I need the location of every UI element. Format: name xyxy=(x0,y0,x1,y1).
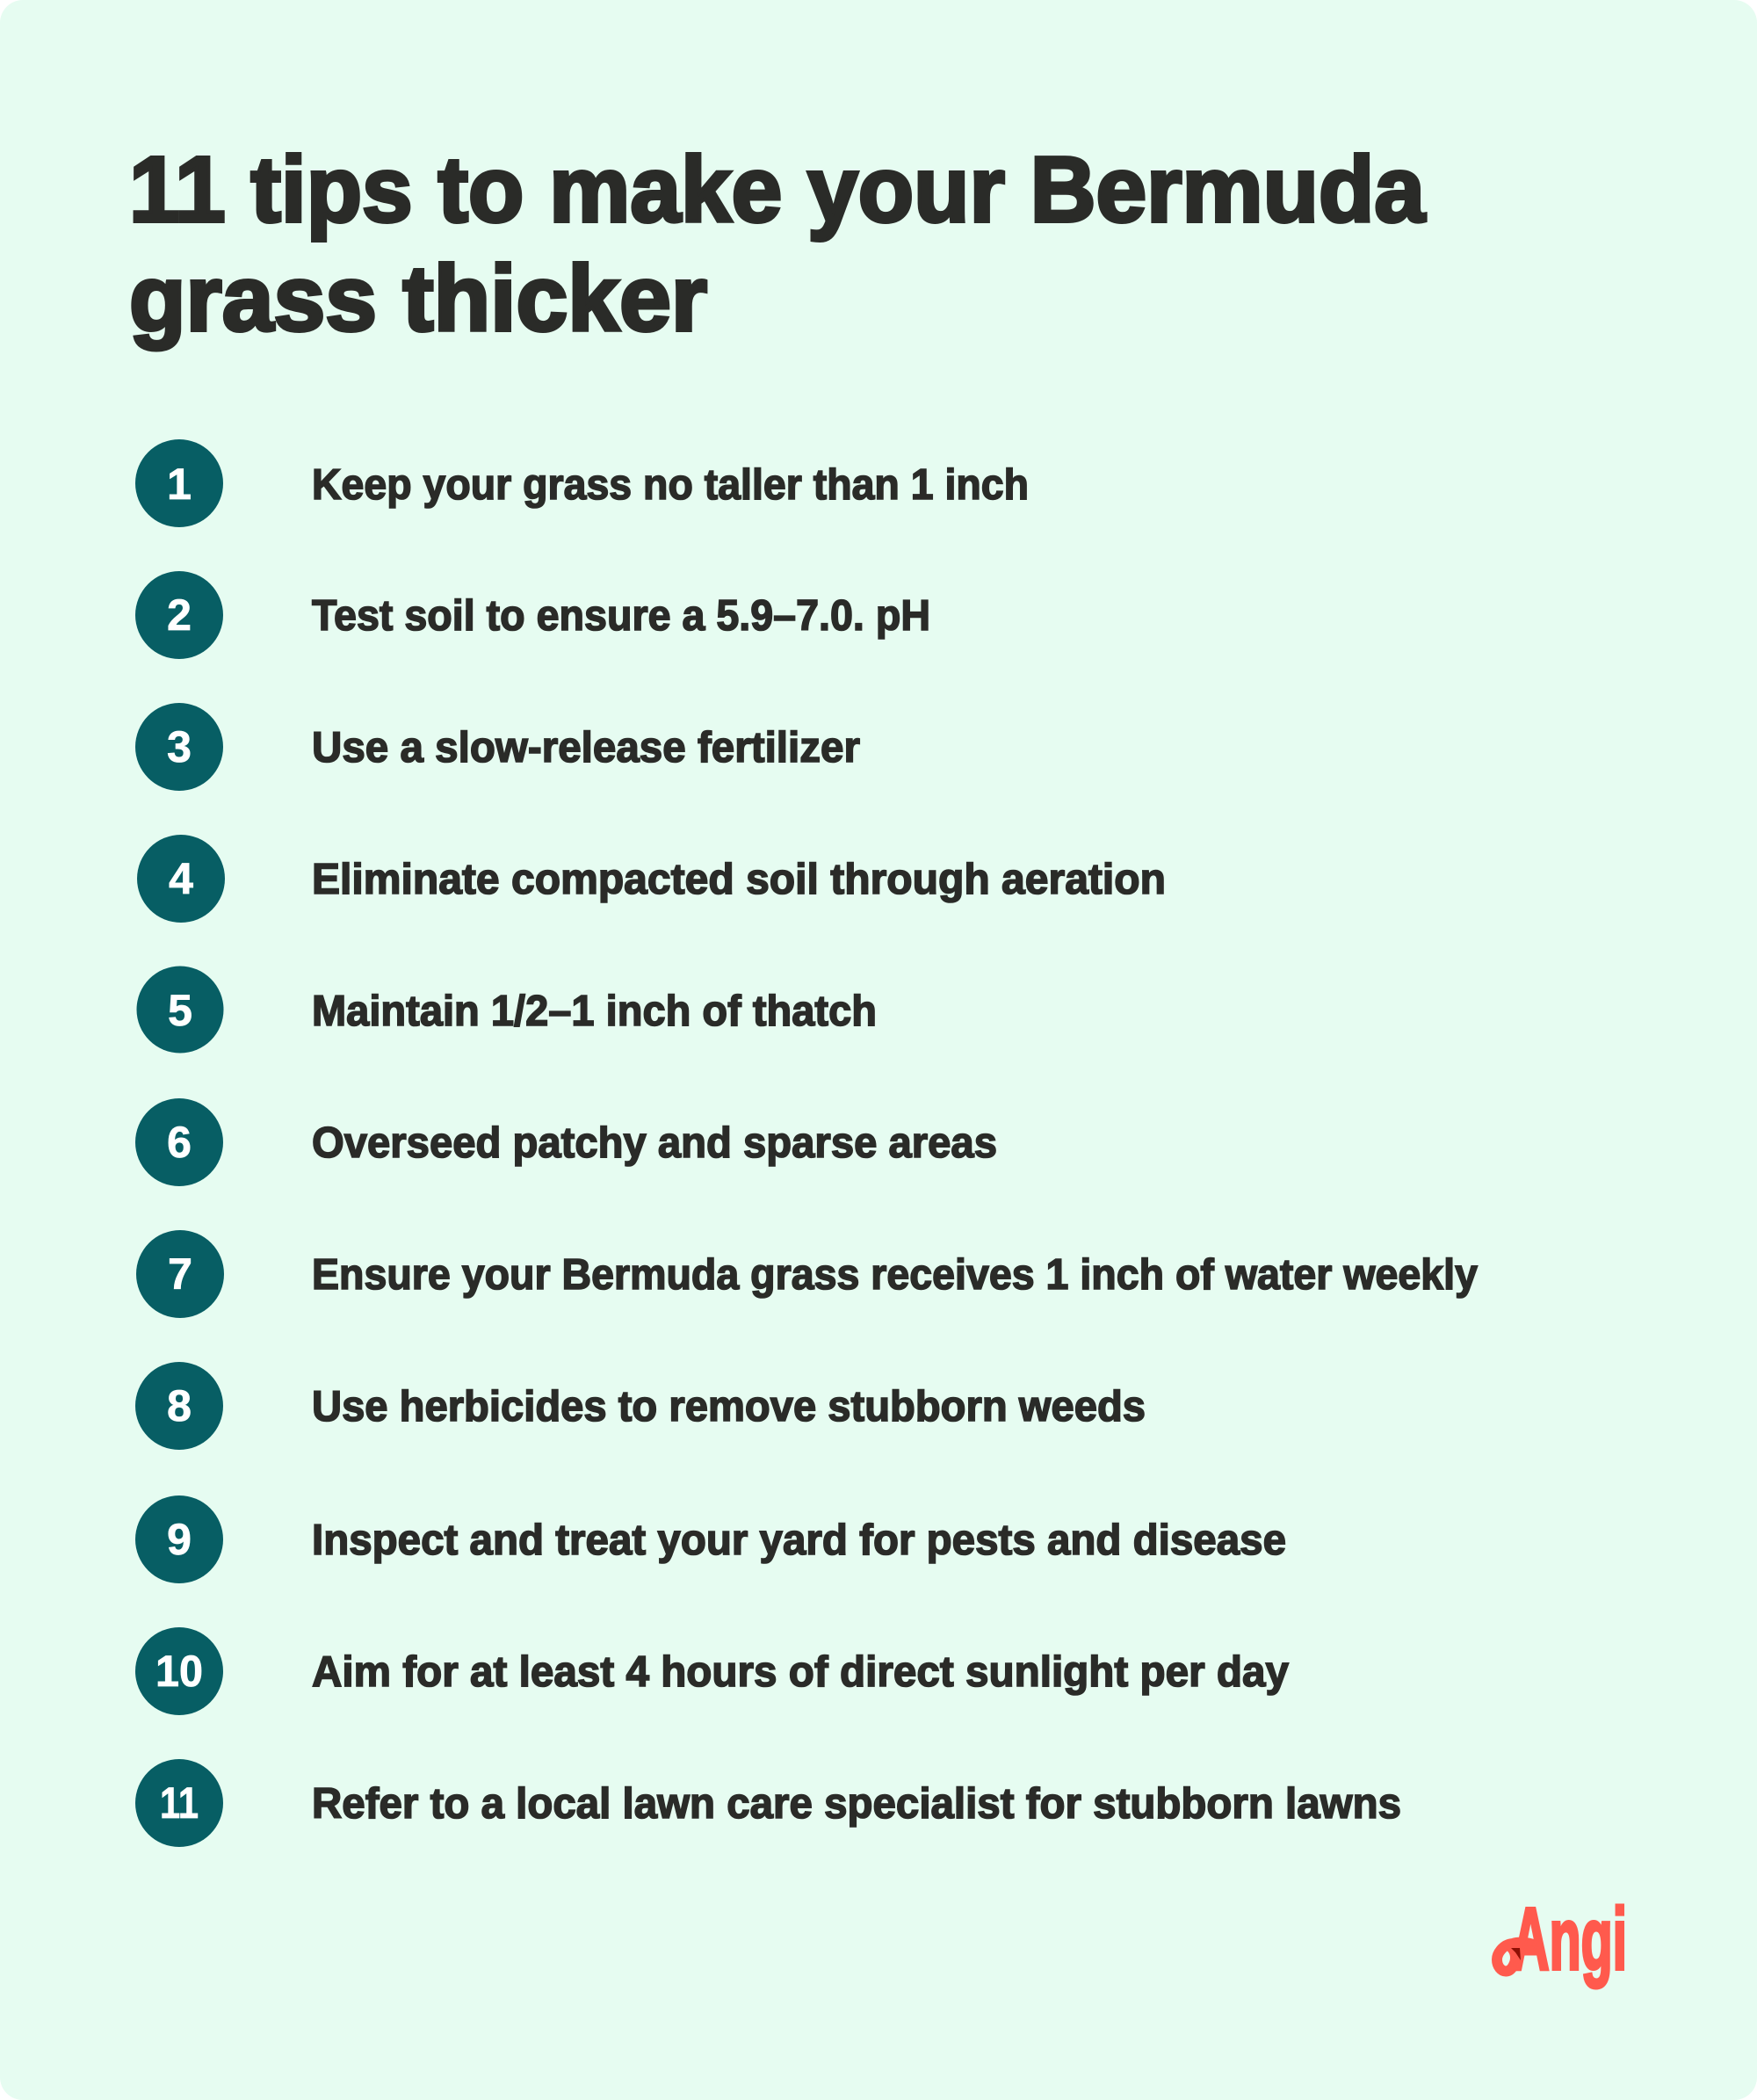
tip 8: 8 xyxy=(167,1381,192,1430)
tip 6: 6 xyxy=(167,1118,192,1167)
tip 8: Use herbicides to remove stubborn weeds xyxy=(312,1383,1146,1430)
tip 2: 2 xyxy=(167,590,192,640)
tip 11 xyxy=(135,1759,1401,1847)
tip 9: 9 xyxy=(167,1515,192,1564)
tip 4: Eliminate compacted soil through aeration xyxy=(312,856,1166,903)
title: grass thicker xyxy=(129,247,707,351)
logo: Angi: Angi xyxy=(1512,1890,1627,1988)
title xyxy=(129,138,1426,351)
tip 8 xyxy=(135,1362,1146,1450)
tip 7: Ensure your Bermuda grass receives 1 inch of water weekly xyxy=(312,1251,1478,1299)
tip 9 xyxy=(135,1495,1286,1583)
tip 10 xyxy=(135,1627,1289,1715)
tip 5 xyxy=(137,967,877,1053)
tip 4: 4 xyxy=(169,854,193,903)
tip 2 xyxy=(135,571,930,659)
tip 6: Overseed patchy and sparse areas xyxy=(312,1119,997,1167)
tip 7 xyxy=(136,1230,1478,1318)
tip 2: Test soil to ensure a 5.9–7.0. pH xyxy=(312,592,930,640)
logo: Angi xyxy=(1497,1890,1627,1988)
tip 10: Aim for at least 4 hours of direct sunlight per day xyxy=(312,1648,1289,1696)
tip 1: 1 xyxy=(167,460,192,509)
tip 6 xyxy=(135,1098,997,1186)
tip 3 xyxy=(135,703,860,791)
tip 9: Inspect and treat your yard for pests and disease xyxy=(312,1517,1286,1564)
title: 11 tips to make your Bermuda xyxy=(129,138,1426,242)
tip 3: 3 xyxy=(167,722,192,771)
tip 1 xyxy=(135,439,1029,527)
tip 7: 7 xyxy=(168,1249,192,1299)
tip 10: 10 xyxy=(155,1647,203,1696)
tip 5: Maintain 1/2–1 inch of thatch xyxy=(312,988,877,1035)
tip 11: 11 xyxy=(160,1778,199,1828)
tip 3: Use a slow-release fertilizer xyxy=(312,724,860,771)
tip 4 xyxy=(137,835,1166,923)
tip 5: 5 xyxy=(168,986,192,1035)
tip 1: Keep your grass no taller than 1 inch xyxy=(312,461,1029,509)
tip 11: Refer to a local lawn care specialist for stubborn lawns xyxy=(312,1780,1401,1828)
